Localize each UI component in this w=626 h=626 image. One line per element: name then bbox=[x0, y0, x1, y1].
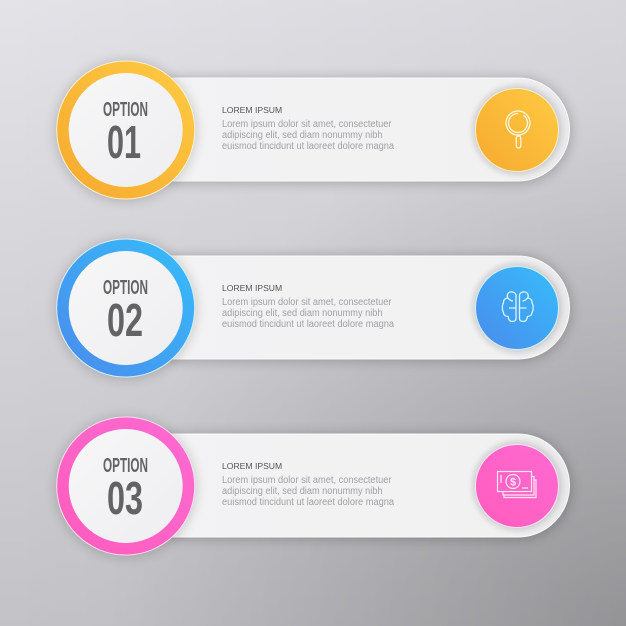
option 02 row bbox=[56, 239, 571, 379]
badge: option 02 number circle bbox=[56, 239, 196, 379]
option 01 row bbox=[56, 61, 571, 201]
number 03: 03 bbox=[107, 472, 143, 524]
icon circle: magnifying glass bbox=[472, 85, 562, 175]
icon circle: money bbox=[472, 441, 562, 531]
text block: option 01: Lorem ipsum dolor sit amet, consectetuer bbox=[222, 119, 392, 130]
panel: option 03 card bbox=[130, 434, 571, 539]
heading: option label: OPTION bbox=[103, 276, 148, 299]
text block: option 03: euismod tincidunt ut laoreet dolore magna bbox=[222, 497, 394, 508]
text block: option 03: Lorem ipsum dolor sit amet, consectetuer bbox=[222, 475, 392, 486]
text block: option 01: adipiscing elit, sed diam nonummy nibh bbox=[222, 130, 382, 141]
badge: option 03 number circle bbox=[56, 417, 196, 557]
badge: option 01 number circle bbox=[56, 61, 196, 201]
text block: option 01 bbox=[222, 105, 394, 152]
icon circle: money: $ bbox=[510, 476, 516, 488]
heading: option label: OPTION bbox=[103, 454, 148, 477]
text block: option 03 bbox=[222, 461, 394, 508]
text block: option 01: LOREM IPSUM bbox=[222, 105, 282, 115]
text block: option 03: adipiscing elit, sed diam nonummy nibh bbox=[222, 486, 382, 497]
panel: option 02 card bbox=[130, 256, 571, 361]
text block: option 02: LOREM IPSUM bbox=[222, 283, 282, 293]
option 03 row bbox=[56, 417, 571, 557]
number 01: 01 bbox=[107, 116, 141, 168]
heading: option label: OPTION bbox=[103, 98, 148, 121]
text block: option 02: adipiscing elit, sed diam nonummy nibh bbox=[222, 308, 382, 319]
text block: option 03: LOREM IPSUM bbox=[222, 461, 282, 471]
text block: option 02 bbox=[222, 283, 394, 330]
text block: option 01: euismod tincidunt ut laoreet dolore magna bbox=[222, 141, 394, 152]
text block: option 02: Lorem ipsum dolor sit amet, consectetuer bbox=[222, 297, 392, 308]
panel: option 01 card bbox=[130, 78, 571, 183]
text block: option 02: euismod tincidunt ut laoreet dolore magna bbox=[222, 319, 394, 330]
number 02: 02 bbox=[107, 294, 143, 346]
icon circle: brain bbox=[472, 263, 562, 353]
